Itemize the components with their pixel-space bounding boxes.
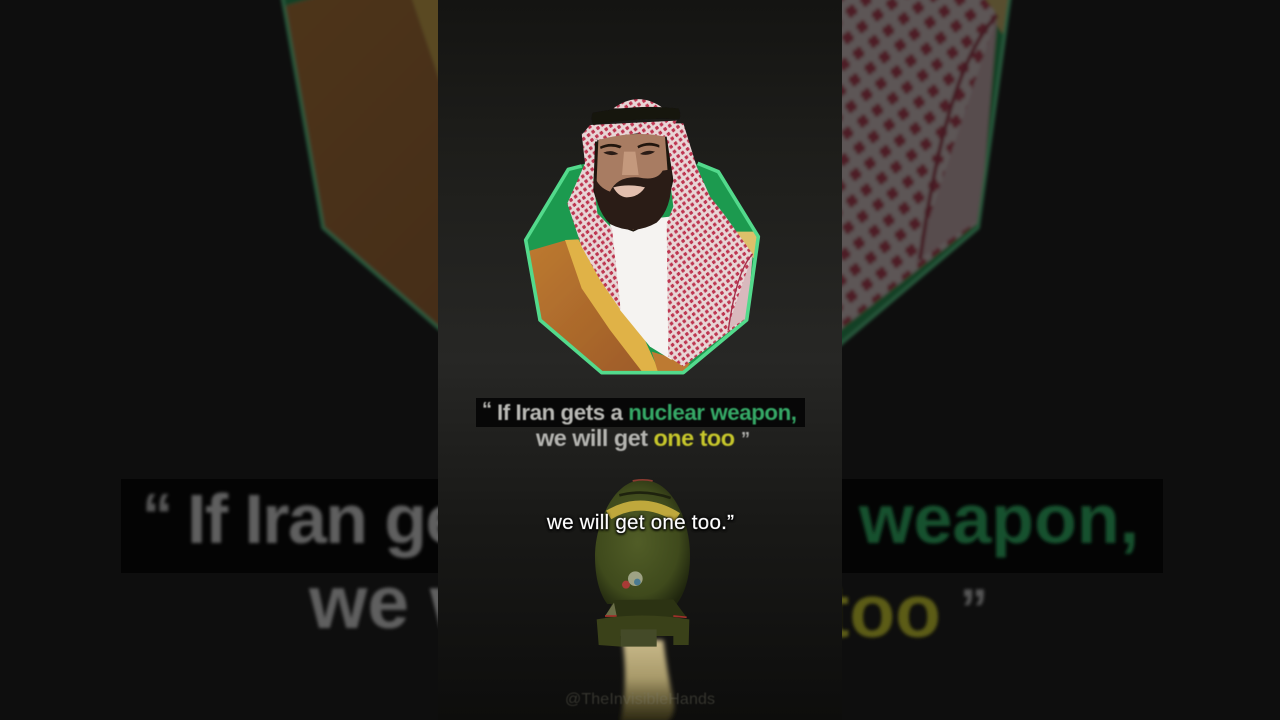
enlarged quote text: we will get [308, 560, 684, 644]
bomb body [595, 480, 690, 604]
enlarged quote text [142, 480, 1139, 653]
enlarged quote text: ” [960, 577, 988, 640]
enlarged quote text: too [824, 569, 941, 653]
panel: blurred backdrop [121, 0, 1163, 653]
emblem [622, 571, 643, 589]
rocket flame [620, 640, 674, 720]
quote text: we will get one too [535, 425, 735, 451]
quote text: “ [482, 399, 492, 421]
subtitle caption: we will get one too.” [546, 511, 734, 534]
nose tip [633, 480, 653, 481]
bomb collar and fins [605, 599, 687, 617]
bomb base ring [597, 615, 689, 647]
quote text: If Iran gets a nuclear weapon, [497, 400, 797, 425]
watermark: @TheInvisibleHands [565, 691, 715, 708]
panel: central video frame [438, 0, 842, 720]
yellow band [609, 506, 677, 517]
enlarged quote text: If Iran gets a [187, 480, 580, 558]
enlarged quote text: weapon, [858, 480, 1139, 558]
portrait enlargement [278, 0, 1020, 400]
enlarged quote bar [121, 479, 1163, 573]
dark band [619, 493, 671, 498]
enlarged quote text: “ [142, 482, 173, 551]
quote text: ” [741, 429, 750, 449]
icon: nuclear bomb rocket [595, 480, 690, 720]
quote bar [476, 398, 805, 427]
panel background [438, 0, 842, 720]
portrait: man in keffiyeh inside green polygon [526, 99, 760, 373]
quote text [482, 399, 797, 451]
